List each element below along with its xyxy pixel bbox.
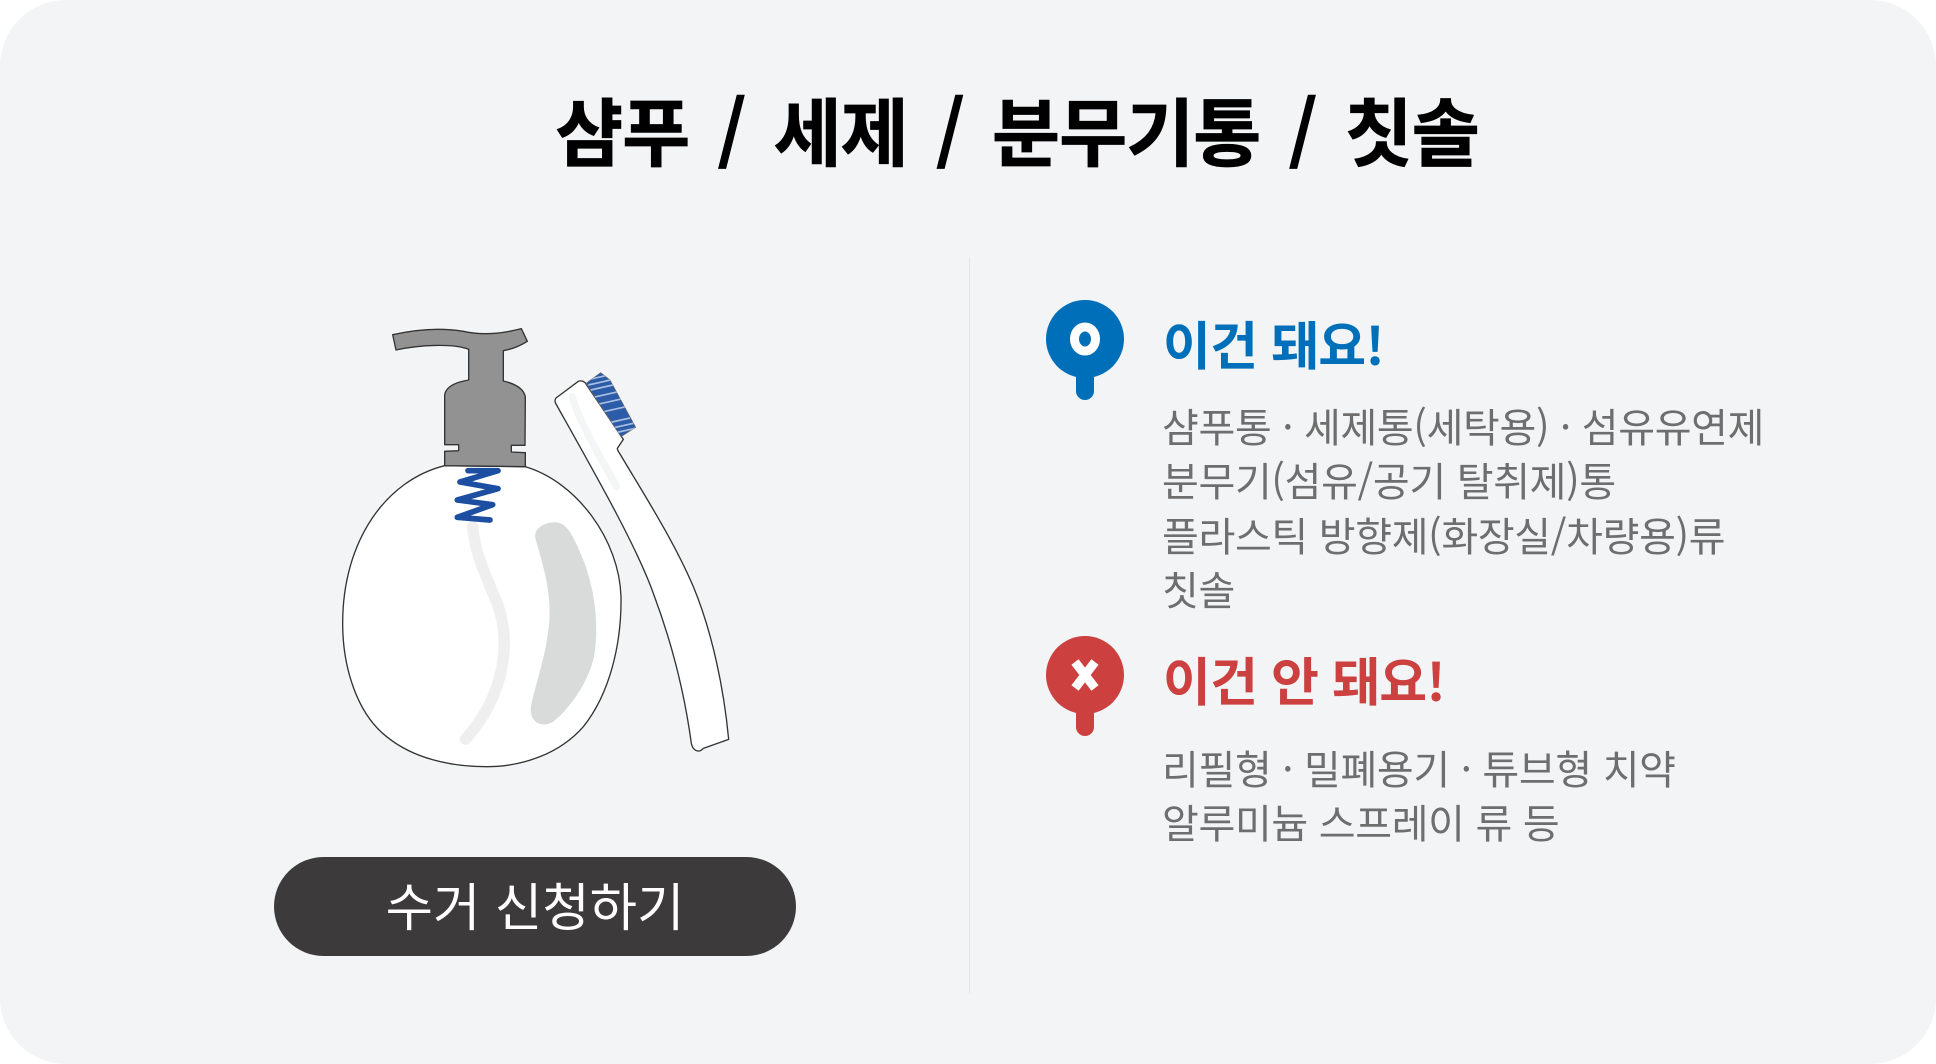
spring xyxy=(457,471,498,520)
icon: X marker xyxy=(1046,636,1124,736)
text: not allowed items: 알루미늄 스프레이 류 등 xyxy=(1162,792,1559,850)
pump head xyxy=(393,329,527,467)
text: allowed items: 샴푸통 · 세제통(세탁용) · 섬유유연제 xyxy=(1162,396,1764,454)
heading: allowed: 이건 돼요! xyxy=(1163,305,1384,380)
button: collection request: 수거 신청하기 xyxy=(386,866,684,941)
text: allowed items xyxy=(1162,396,1764,617)
text: not allowed items: 리필형 · 밀폐용기 · 튜브형 치약 xyxy=(1162,738,1676,796)
bottle body xyxy=(343,466,621,767)
text: allowed items: 칫솔 xyxy=(1162,559,1235,617)
toothbrush handle xyxy=(555,381,729,751)
text: allowed items: 분무기(섬유/공기 탈취제)통 xyxy=(1162,450,1616,508)
bottle highlight: grey reflection xyxy=(531,522,596,725)
illustration: pump bottle and toothbrush xyxy=(342,328,730,768)
heading: not allowed: 이건 안 돼요! xyxy=(1163,641,1445,716)
title: 샴푸 / 세제 / 분무기통 / 칫솔 xyxy=(555,75,1479,182)
bottle highlight: thin straw xyxy=(465,527,504,739)
button: collection request xyxy=(274,857,796,956)
text: not allowed items xyxy=(1162,738,1676,850)
text: allowed items: 플라스틱 방향제(화장실/차량용)류 xyxy=(1162,505,1725,563)
toothbrush highlight xyxy=(572,397,617,487)
icon: O marker xyxy=(1046,300,1124,400)
toothbrush bristles xyxy=(586,373,637,437)
